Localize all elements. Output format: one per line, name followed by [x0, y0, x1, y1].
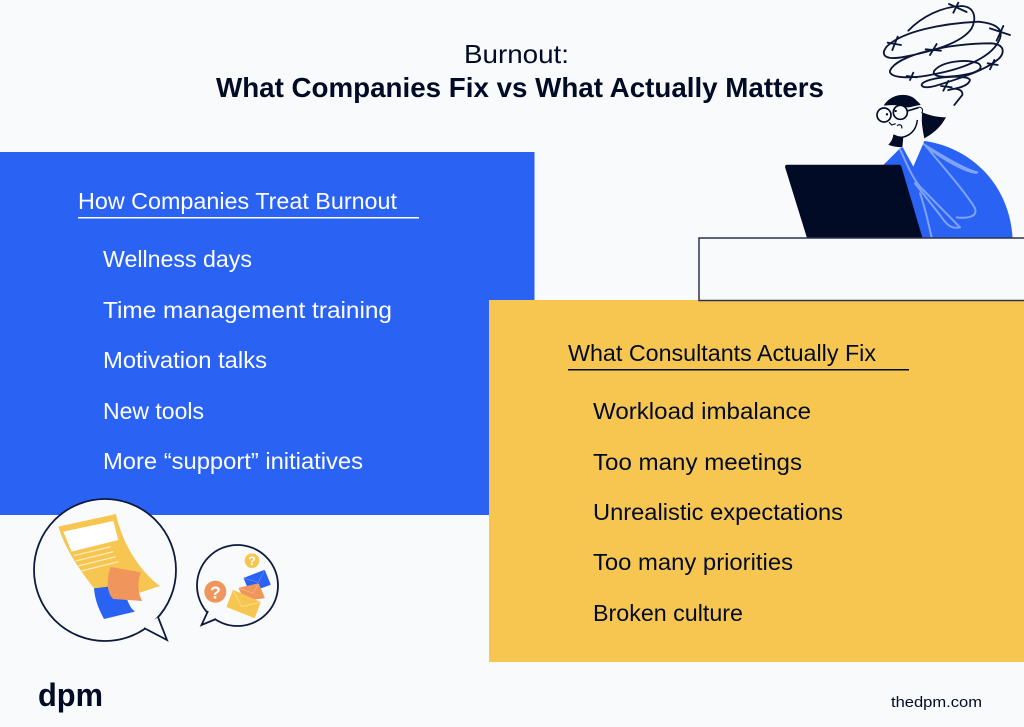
- speech bubble: emails and questions: [197, 545, 278, 626]
- list: consultant fixes: Unrealistic expectations: [593, 499, 843, 525]
- icon: orange note: [108, 567, 142, 601]
- list: company treatments: Motivation talks: [103, 347, 267, 373]
- hair top: [884, 95, 921, 107]
- neck and collar: [903, 132, 924, 167]
- icon: blue envelope: [244, 571, 270, 592]
- document white block: [63, 521, 118, 552]
- list: consultant fixes: Workload imbalance: [593, 398, 811, 424]
- title: What Companies Fix vs What Actually Matters: [216, 72, 824, 103]
- jaw line: [893, 120, 917, 137]
- list: company treatments: New tools: [103, 398, 204, 424]
- ear: [917, 107, 922, 113]
- panel: what consultants actually fix: [489, 300, 1024, 662]
- list: company treatments: [103, 246, 392, 474]
- list: consultant fixes: Broken culture: [593, 600, 743, 626]
- icon: yellow envelope: [227, 591, 260, 617]
- list: consultant fixes: [593, 398, 843, 626]
- mouth: [889, 122, 902, 128]
- title: [216, 39, 824, 103]
- list: consultant fixes: Too many meetings: [593, 449, 802, 475]
- bubble tail: [144, 617, 167, 640]
- head: glasses, hair and face: [877, 95, 946, 167]
- icon: yellow document: [58, 514, 160, 595]
- list: company treatments: More “support” initiatives: [103, 448, 363, 474]
- hair bottom: [888, 135, 903, 147]
- heading: what consultants actually fix: What Consultants Actually Fix: [568, 340, 877, 366]
- list: company treatments: Wellness days: [103, 246, 252, 272]
- bubble tail: [202, 611, 216, 625]
- icon: orange envelope: [239, 584, 264, 600]
- title: Burnout:: [464, 39, 569, 69]
- glasses: [877, 105, 918, 122]
- icon: blue sheet: [94, 587, 135, 619]
- list: consultant fixes: Too many priorities: [593, 549, 793, 575]
- illustration: stressed person at laptop: [785, 3, 1013, 238]
- document text lines: [74, 547, 118, 571]
- website url: thedpm.com: [891, 694, 982, 711]
- body: blue sweater: [883, 141, 1013, 238]
- heading: how companies treat burnout: How Companies Treat Burnout: [78, 188, 398, 214]
- icon: yellow question mark: ?: [248, 554, 256, 568]
- hair back: [922, 112, 946, 138]
- laptop: [785, 165, 922, 238]
- icon: orange question mark: ?: [210, 582, 221, 602]
- logo: dpm: dpm: [38, 677, 103, 713]
- desk: [699, 238, 1024, 300]
- panel: how companies treat burnout: [0, 152, 534, 515]
- list: company treatments: Time management training: [103, 297, 392, 323]
- icon: tangled scribble with stars: [884, 3, 1010, 105]
- speech bubble: documents: [34, 499, 176, 641]
